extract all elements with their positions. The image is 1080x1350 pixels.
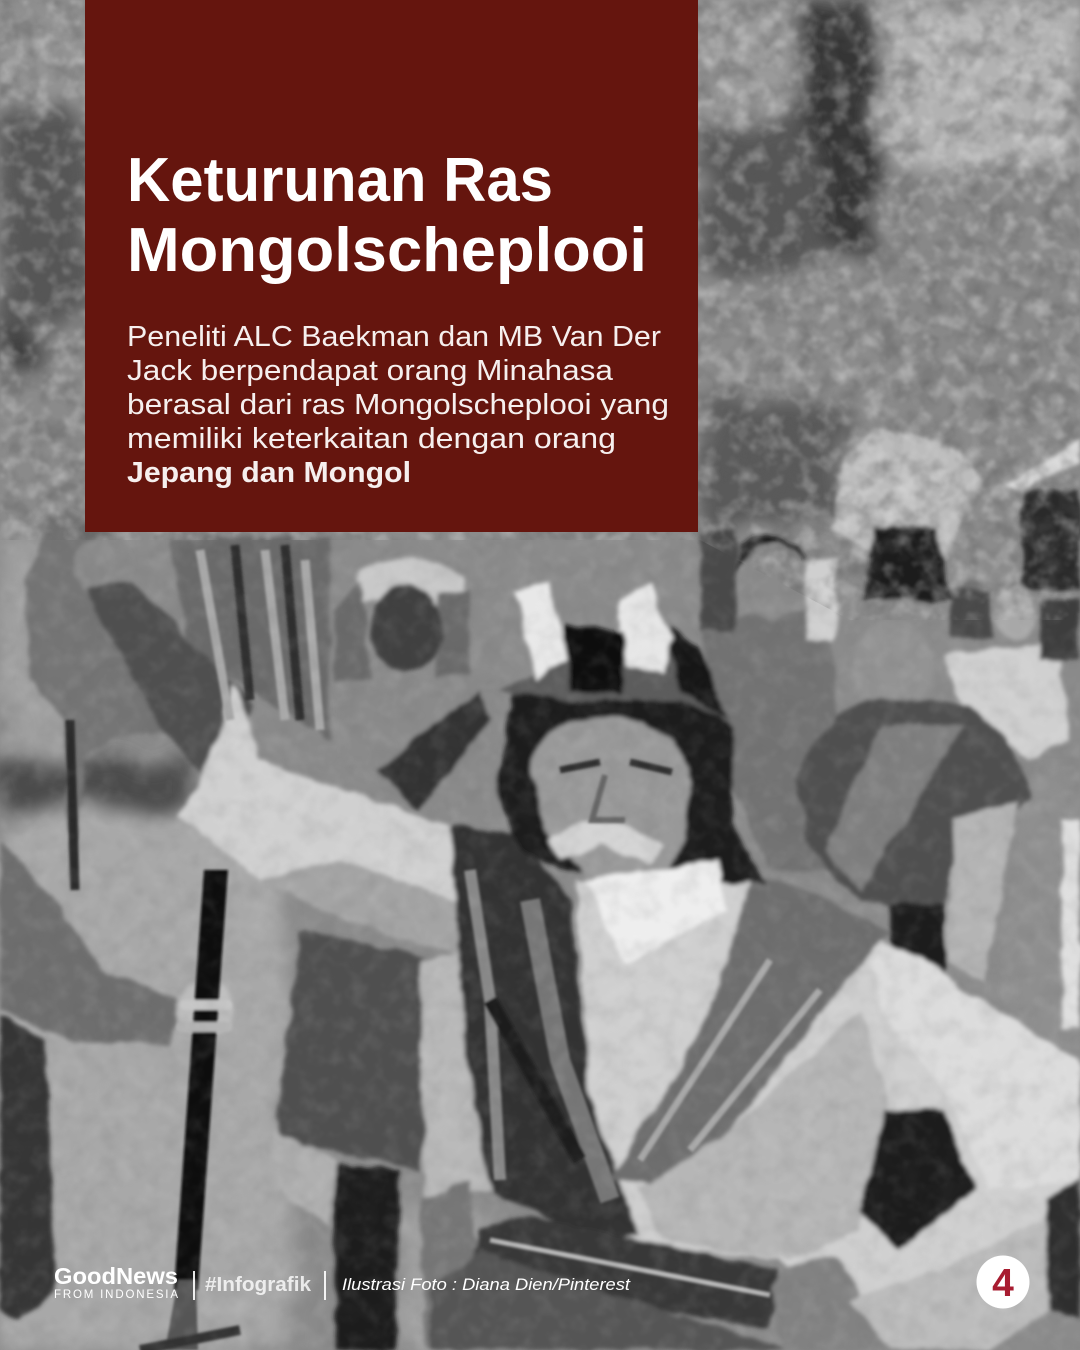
- body text: [127, 321, 669, 489]
- page number badge: 4: [992, 1262, 1014, 1305]
- title: Mongolscheplooi: [127, 216, 647, 285]
- left figure: [0, 840, 180, 1045]
- body text: Jepang dan Mongol: [127, 457, 411, 489]
- logo: GoodNews from Indonesia: [54, 1263, 178, 1301]
- panel: dark red text panel: [85, 0, 698, 532]
- logo: GoodNews from Indonesia: GoodNews: [54, 1263, 178, 1289]
- title: Keturunan Ras: [127, 146, 553, 215]
- body text: Jack berpendapat orang Minahasa: [127, 355, 614, 387]
- second man: [360, 559, 465, 605]
- body text: berasal dari ras Mongolscheplooi yang: [127, 389, 669, 421]
- hashtag: #Infografik: [205, 1274, 312, 1296]
- foliage behind raised arm: [170, 535, 330, 740]
- far background people: [700, 610, 850, 870]
- footer credits: [54, 1263, 631, 1301]
- photo credit: Ilustrasi Foto : Diana Dien/Pinterest: [342, 1275, 631, 1294]
- logo: GoodNews from Indonesia: FROM INDONESIA: [54, 1289, 178, 1301]
- cloth in raised hand: [25, 505, 170, 890]
- right man: [835, 430, 985, 560]
- main man body: [575, 855, 1080, 1320]
- main man hair and headdress: [495, 670, 765, 885]
- spear: [174, 870, 228, 1290]
- raised arm sleeve: [180, 685, 460, 955]
- page number badge: [976, 1256, 1030, 1308]
- body text: memiliki keterkaitan dengan orang: [127, 423, 616, 455]
- roof and hut at right: [1005, 440, 1080, 492]
- title: [127, 146, 647, 285]
- body text: Peneliti ALC Baekman dan MB Van Der: [127, 321, 661, 353]
